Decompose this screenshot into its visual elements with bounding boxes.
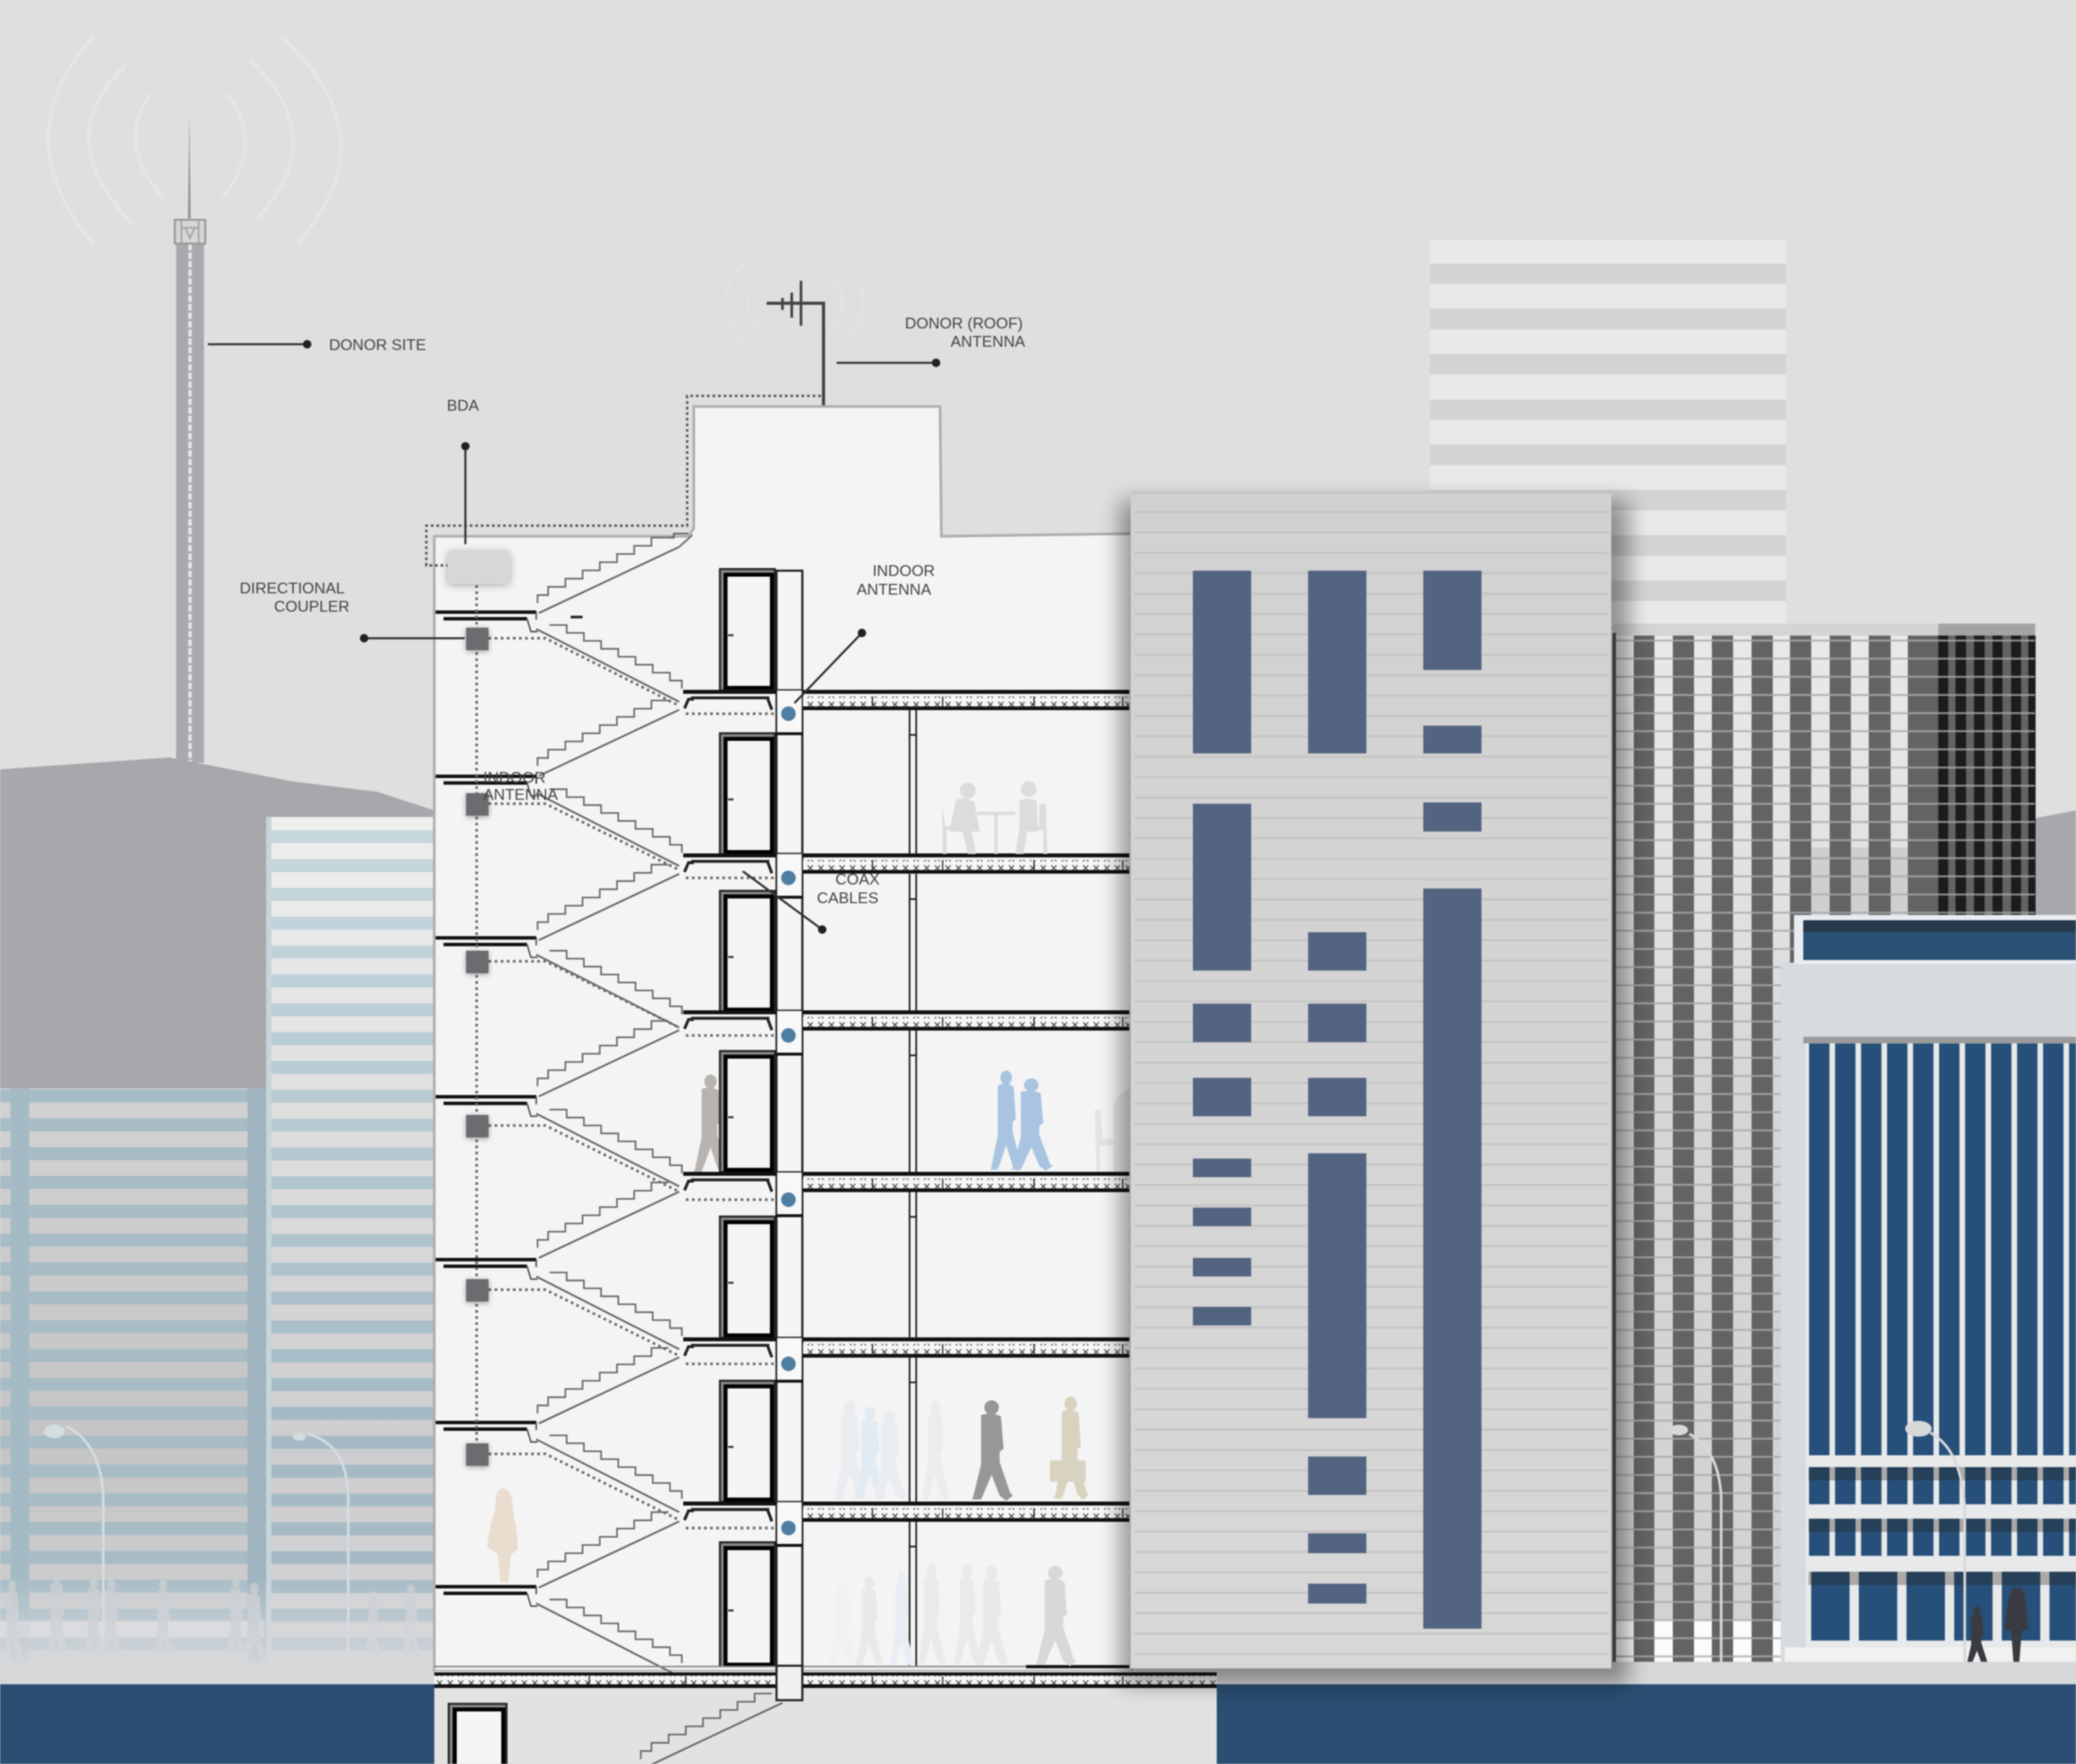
panel: exterior facade block with windows bbox=[1131, 492, 1611, 1668]
callout: coax cables: CABLES bbox=[817, 889, 879, 906]
callout: BDA bbox=[447, 396, 479, 544]
people: faint group, upper floor bbox=[834, 1400, 950, 1501]
callout: donor roof antenna bbox=[837, 314, 1026, 367]
label: indoor antenna, overlapping landing: ANTENNA bbox=[483, 786, 558, 803]
street lamps on the right bbox=[1670, 1421, 1965, 1664]
doors bbox=[448, 568, 776, 1764]
callout: BDA: BDA bbox=[447, 396, 479, 414]
icon: BDA box bbox=[448, 551, 510, 584]
left landings bbox=[436, 610, 537, 1606]
stairs bbox=[536, 534, 782, 1764]
callout: donor roof antenna: ANTENNA bbox=[951, 333, 1026, 350]
person: grey walker bbox=[972, 1400, 1013, 1501]
panel: building section interior bbox=[426, 396, 1217, 1764]
callout: indoor antenna, upper: INDOOR bbox=[873, 562, 935, 580]
callout: coax cables: COAX bbox=[835, 870, 880, 888]
block shadow bbox=[1120, 501, 1628, 1684]
elevator shaft bbox=[776, 571, 802, 1669]
icon: donor roof antenna bbox=[726, 258, 864, 405]
icon: donor tower radio waves bbox=[48, 37, 341, 243]
hill behind left buildings bbox=[0, 757, 434, 1090]
people: seated pair at a table bbox=[942, 782, 1047, 854]
callout: donor site bbox=[208, 336, 426, 354]
person: beige walker with briefcase bbox=[1050, 1396, 1089, 1500]
windows: column 2 bbox=[1308, 571, 1366, 1604]
interior partition columns bbox=[909, 710, 916, 1667]
floor slabs bbox=[683, 690, 1129, 1547]
callout: indoor antenna, upper bbox=[795, 562, 935, 703]
coax cable: roof to BDA bbox=[426, 396, 821, 566]
callout: directional coupler bbox=[240, 579, 465, 643]
icons: indoor antennas bbox=[781, 707, 796, 1536]
people: blue pair walking bbox=[991, 1071, 1053, 1171]
panel: blue office building on the right bbox=[1780, 915, 2076, 1664]
ground floor slab bbox=[434, 1665, 1217, 1700]
person: grey figure by the door bbox=[693, 1075, 728, 1173]
label: indoor antenna, overlapping landing bbox=[483, 768, 558, 803]
people: faint group, lower floor bbox=[829, 1563, 1076, 1667]
back building: striped tower bbox=[1430, 240, 1786, 635]
pedestrians on the right street bbox=[1966, 1588, 2029, 1666]
panel: left striped building bbox=[266, 817, 434, 1664]
icons: directional couplers bbox=[466, 628, 488, 1466]
windows: column 1 bbox=[1193, 571, 1251, 1325]
sidewalk bbox=[0, 1662, 2076, 1684]
icon: roof antenna radio waves bbox=[726, 258, 864, 350]
callout: directional coupler: COUPLER bbox=[274, 598, 350, 615]
coax cable: riser and floor branches bbox=[477, 586, 776, 1528]
callout: donor roof antenna: DONOR (ROOF) bbox=[905, 314, 1023, 331]
windows: column 3 bbox=[1423, 571, 1481, 1629]
street fog bbox=[0, 1575, 434, 1664]
person: seated at right edge bbox=[1095, 1090, 1129, 1172]
person: woman silhouette on stairs level bbox=[487, 1488, 518, 1582]
label: indoor antenna, overlapping landing: INDOOR bbox=[483, 768, 546, 786]
street lamps on the left bbox=[44, 1425, 348, 1660]
callout: coax cables bbox=[742, 870, 880, 933]
pedestrians on the left street bbox=[0, 1571, 422, 1663]
right hill bbox=[2035, 811, 2076, 927]
callout: directional coupler: DIRECTIONAL bbox=[240, 579, 345, 596]
panel: dark striped building on the right bbox=[1613, 624, 2036, 1664]
panel: left low building bbox=[0, 1089, 266, 1664]
road bbox=[0, 1684, 2076, 1764]
icon: donor site tower bbox=[174, 116, 205, 762]
callout: donor site: DONOR SITE bbox=[329, 336, 426, 354]
callout: indoor antenna, upper: ANTENNA bbox=[857, 581, 932, 598]
